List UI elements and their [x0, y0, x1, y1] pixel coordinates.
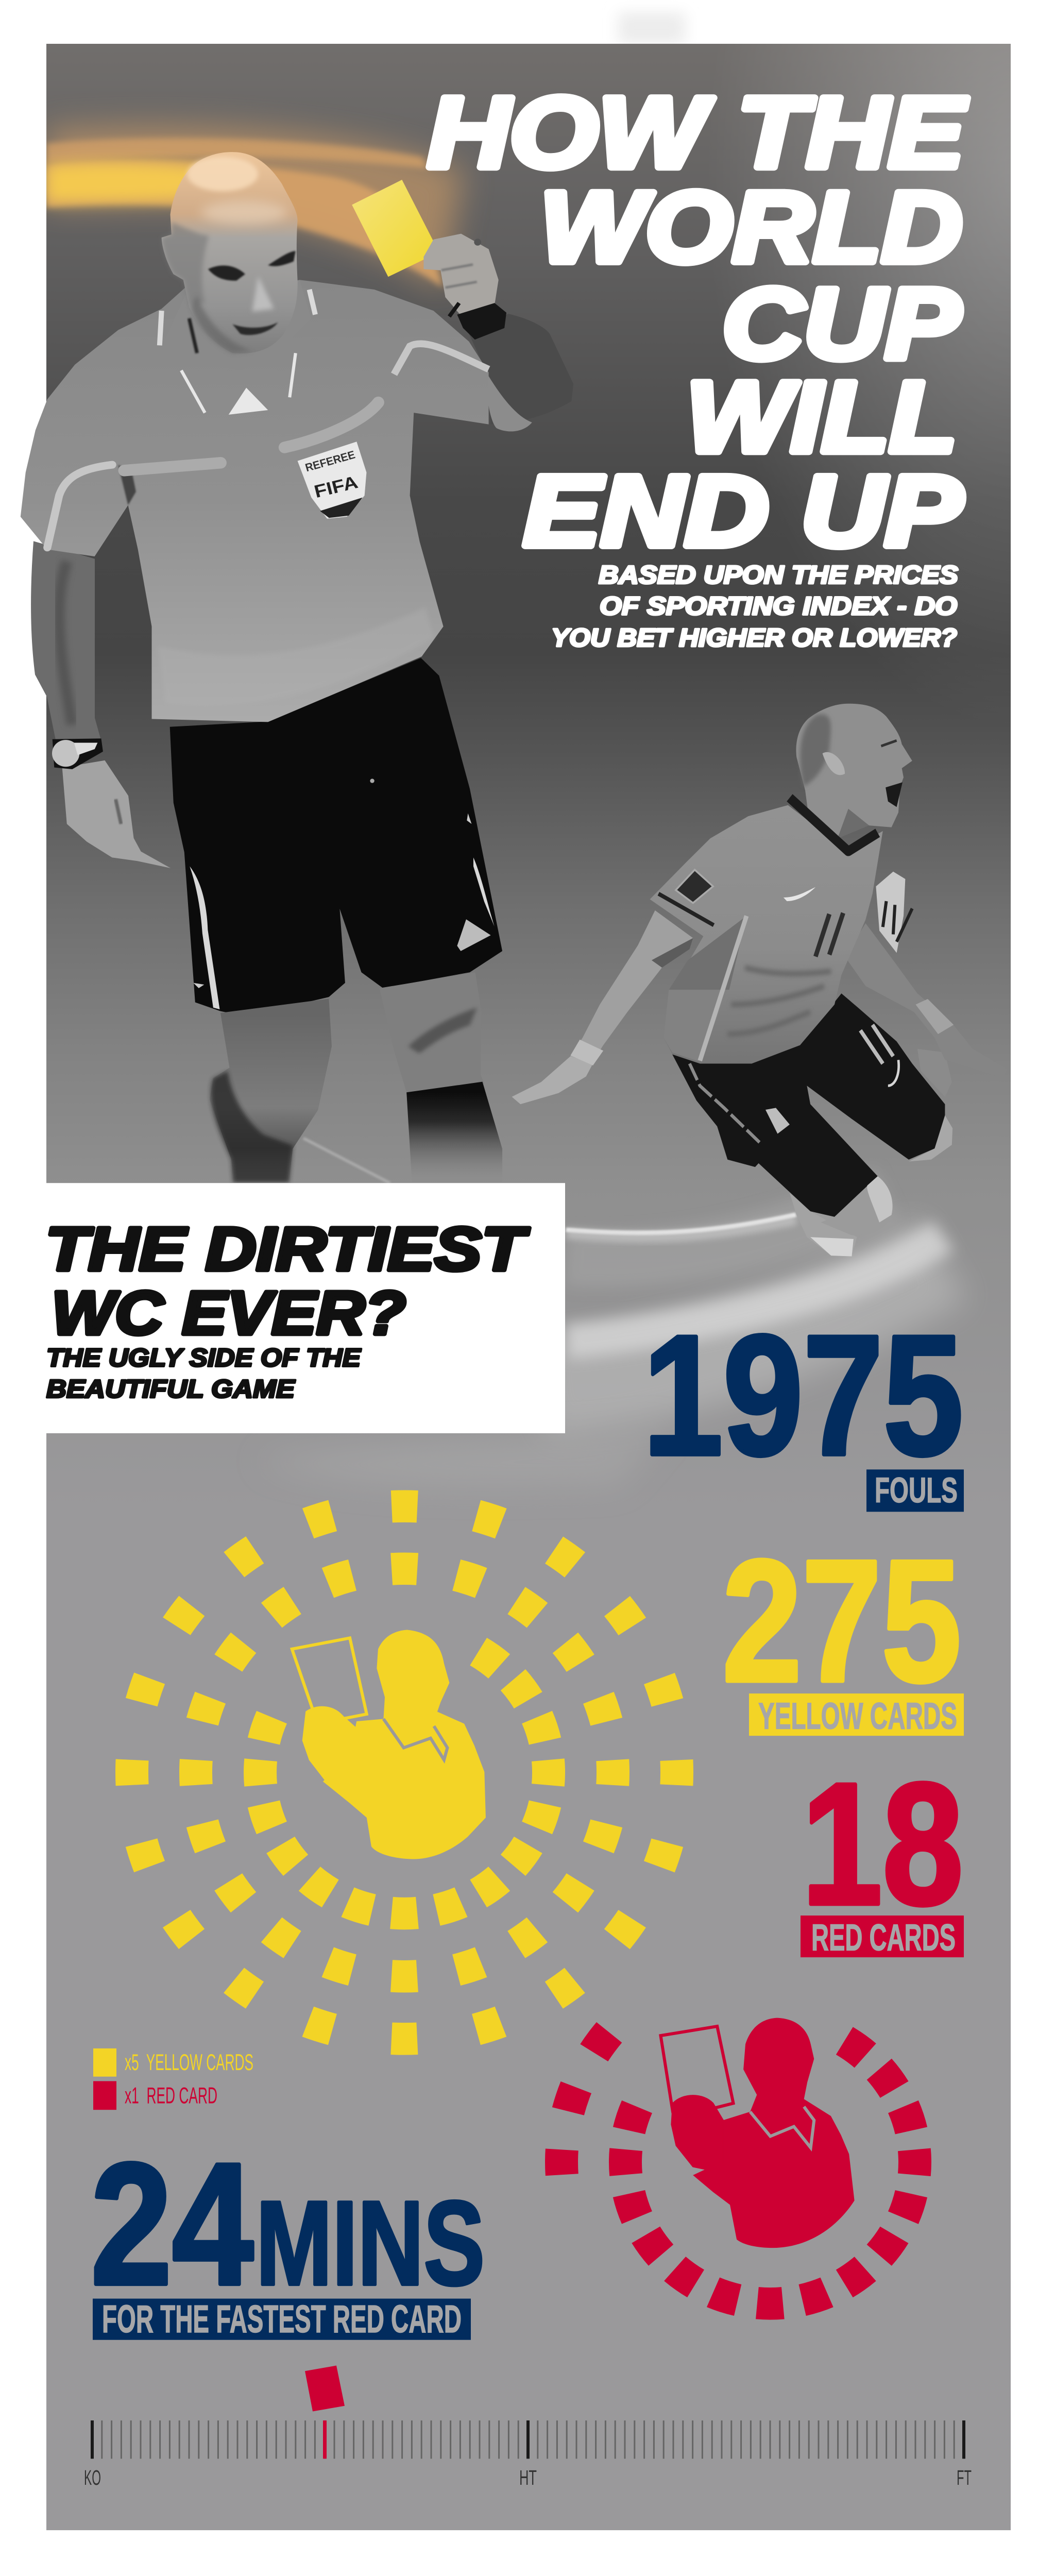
panel: dirtiest heading box — [45, 1183, 565, 1433]
stat: 275 yellow cards: 275 — [722, 1524, 961, 1718]
stat: 24 mins — [91, 2127, 485, 2341]
player outstretched arm — [512, 910, 693, 1104]
red card ring — [561, 2018, 915, 2303]
player shirt — [650, 805, 883, 1063]
match timeline: FT — [957, 2466, 972, 2489]
referee right arm and elbow — [469, 314, 573, 431]
player photo — [512, 704, 1007, 1257]
stat: 24 mins: FOR THE FASTEST RED CARD — [102, 2298, 462, 2341]
referee FIFA badge: FIFA — [312, 472, 360, 502]
referee FIFA badge — [298, 442, 366, 519]
icon: yellow referee silhouette — [292, 1630, 486, 1859]
legend: x1 RED CARD — [125, 2082, 217, 2108]
match timeline: HT — [519, 2466, 537, 2489]
legend: x5 YELLOW CARDS — [125, 2049, 253, 2075]
main title — [428, 76, 967, 567]
subtitle: BASED UPON THE PRICES — [599, 561, 958, 589]
main title: CUP — [722, 267, 961, 380]
inner arc of yellow cards — [260, 1652, 549, 1913]
player head — [790, 704, 912, 851]
main title: WILL — [686, 361, 957, 473]
player far arm and boot — [845, 872, 1007, 1097]
stat: 24 mins: 24 — [91, 2127, 254, 2321]
main title: HOW THE — [428, 76, 967, 189]
orange light streak — [46, 125, 464, 290]
match timeline — [84, 2420, 972, 2489]
stat: 18 red cards: 18 — [802, 1747, 963, 1941]
stat: 18 red cards: RED CARDS — [811, 1917, 956, 1958]
referee left arm — [31, 541, 101, 740]
subtitle: OF SPORTING INDEX - DO — [600, 592, 957, 620]
outer ring of yellow cards — [132, 1506, 677, 2039]
heading: the dirtiest wc ever: WC EVER? — [52, 1279, 406, 1347]
referee legs — [210, 972, 502, 1182]
legend — [93, 2048, 253, 2110]
subtitle — [551, 561, 958, 652]
referee raised hand — [423, 234, 506, 340]
yellow card burst — [132, 1506, 677, 2039]
stat: 1975 fouls: 1975 — [643, 1300, 963, 1491]
referee head — [162, 152, 311, 370]
referee photo — [21, 152, 573, 1182]
swoosh lights — [258, 1138, 943, 1487]
subheading: ugly side: THE UGLY SIDE OF THE — [46, 1344, 362, 1372]
stat: 1975 fouls: FOULS — [875, 1470, 958, 1510]
referee shirt — [21, 280, 489, 722]
player shorts — [672, 993, 945, 1217]
icon: tilted red card — [305, 2366, 345, 2411]
red cards arc — [625, 2041, 915, 2303]
player legs and boot — [790, 1115, 952, 1257]
heading: the dirtiest wc ever — [45, 1215, 530, 1347]
referee left hand and watch — [52, 738, 171, 868]
middle ring of yellow cards — [196, 1569, 613, 1976]
subtitle: YOU BET HIGHER OR LOWER? — [551, 624, 957, 652]
top smudge — [618, 12, 685, 44]
match timeline: KO — [84, 2466, 101, 2489]
icon: red referee silhouette — [660, 2018, 855, 2248]
main title: WORLD — [540, 171, 962, 283]
referee FIFA badge: REFEREE — [304, 448, 356, 474]
subheading: ugly side: BEAUTIFUL GAME — [46, 1375, 296, 1403]
stat: 24 mins: MINS — [256, 2176, 485, 2310]
referee shorts — [170, 658, 502, 1016]
subheading: ugly side — [46, 1344, 362, 1403]
heading: the dirtiest wc ever: THE DIRTIEST — [45, 1215, 530, 1283]
main title: END UP — [523, 454, 963, 567]
outer red cards — [561, 2032, 609, 2175]
yellow card held by referee — [352, 180, 506, 340]
